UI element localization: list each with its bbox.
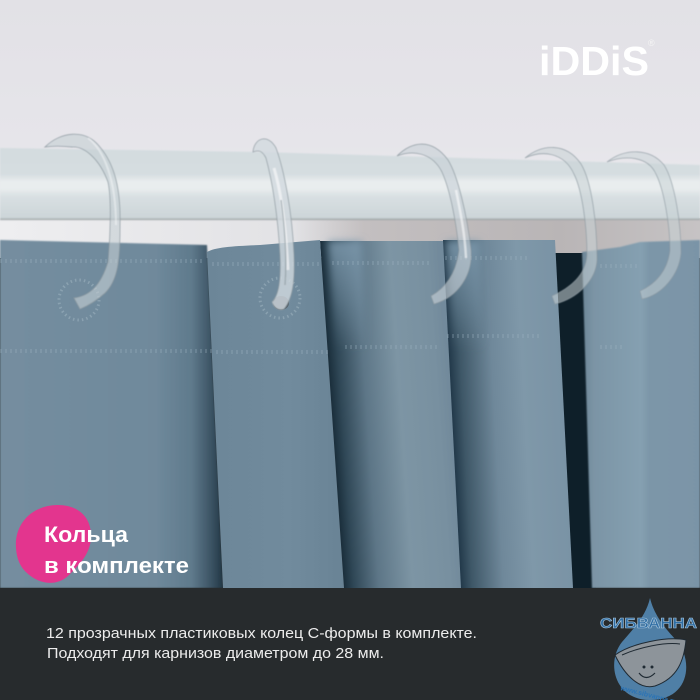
panel: curtain fold 2 xyxy=(207,240,344,588)
curtain grommets xyxy=(59,278,300,320)
logo: iDDiS: ® xyxy=(648,38,655,48)
heading: Кольца xyxy=(44,522,128,547)
fold shading fade at top xyxy=(328,241,484,350)
panel: dark gap between folds xyxy=(553,253,596,588)
heading: в комплекте xyxy=(44,553,189,578)
description text: Подходят для карнизов диаметром до 28 мм. xyxy=(47,646,384,662)
shadow band below rod xyxy=(0,218,700,258)
panel: curtain fold 1 xyxy=(0,240,223,588)
logo: iDDiS: iDDiS xyxy=(539,38,649,84)
description text xyxy=(46,626,477,662)
wall background xyxy=(0,0,700,240)
icon: water drop xyxy=(614,598,686,700)
icon: bathtub xyxy=(615,639,686,687)
ring 3 xyxy=(397,144,471,304)
ring 2 xyxy=(253,139,294,310)
panel: curtain fold 4 xyxy=(443,240,573,588)
curtain rod xyxy=(0,148,700,220)
stitching lines xyxy=(0,258,640,352)
grommet hole xyxy=(273,296,289,310)
ring 1 xyxy=(45,134,120,309)
heading xyxy=(46,526,188,573)
ring 5 xyxy=(607,152,681,299)
watermark: Sibvanna logo xyxy=(600,598,698,700)
pink blob xyxy=(16,505,91,583)
description text: 12 прозрачных пластиковых колец С-формы в комплекте. xyxy=(46,626,477,642)
panel: curtain fold 5 xyxy=(582,240,700,588)
panel: curtain fold 3 xyxy=(320,241,469,588)
footer panel xyxy=(0,588,700,700)
watermark name: СИБВАННА xyxy=(600,616,698,632)
ring 4 xyxy=(525,147,597,304)
